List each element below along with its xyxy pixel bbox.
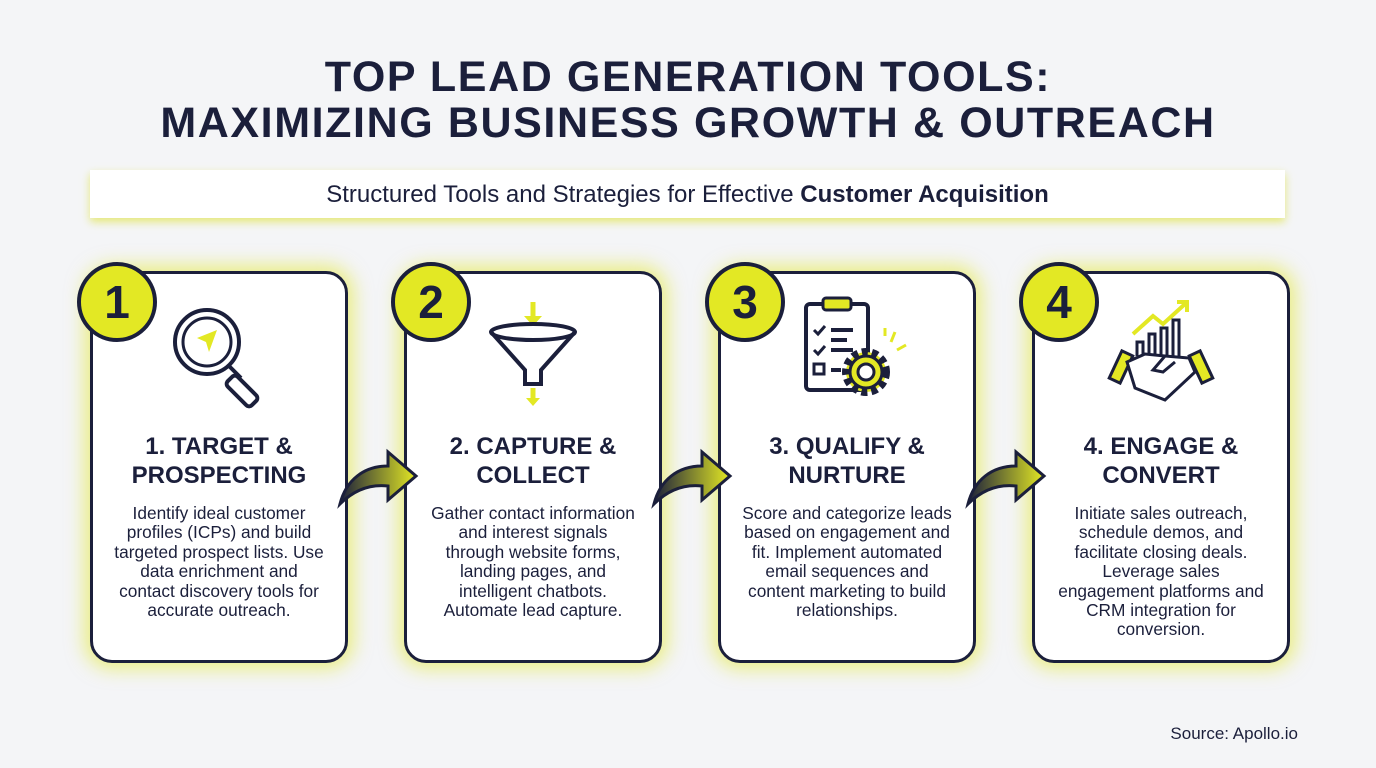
badge 2: 2 — [418, 276, 444, 328]
arrow 2 — [651, 448, 732, 509]
title — [160, 53, 1216, 147]
body text: Initiate sales outreach, schedule demos, and facilitate closing deals. Leverage sales engagement platforms and CRM integration for conversion. — [1058, 503, 1264, 639]
icon: magnifier — [173, 308, 260, 408]
badge 4: 4 — [1046, 276, 1072, 328]
heading: 1. TARGET & — [145, 433, 293, 460]
badge 1 — [77, 262, 157, 342]
heading — [132, 433, 306, 489]
subtitle banner — [90, 170, 1285, 218]
badge 4 — [1019, 262, 1099, 342]
source: Source: Apollo.io — [1170, 724, 1298, 743]
title: TOP LEAD GENERATION TOOLS: — [325, 53, 1051, 101]
heading — [1084, 433, 1238, 489]
heading — [769, 433, 925, 489]
panel: step 3 — [718, 271, 976, 663]
arrow 3 — [965, 448, 1046, 509]
panel: step 4 — [1032, 271, 1290, 663]
badge 3 — [705, 262, 785, 342]
body text: Gather contact information and interest signals through website forms, landing pages, and intelligent chatbots. Automate lead capture. — [431, 503, 635, 620]
heading — [450, 433, 616, 489]
body text: Identify ideal customer profiles (ICPs) and build targeted prospect lists. Use data enrichment and contact discovery tools for accurate outreach. — [114, 503, 324, 620]
icon: handshake with chart — [1107, 300, 1215, 402]
heading: 3. QUALIFY & — [769, 433, 925, 460]
heading: NURTURE — [788, 462, 906, 489]
panel: step 2 — [404, 271, 662, 663]
badge 1: 1 — [104, 276, 130, 328]
icon: clipboard with gear — [804, 296, 907, 396]
badge 3: 3 — [732, 276, 758, 328]
heading: CONVERT — [1102, 462, 1220, 489]
body text: Score and categorize leads based on engagement and fit. Implement automated email sequences and content marketing to build relationships. — [742, 503, 952, 620]
heading: PROSPECTING — [132, 462, 306, 489]
subtitle banner: Structured Tools and Strategies for Effective Customer Acquisition — [326, 181, 1049, 208]
heading: 2. CAPTURE & — [450, 433, 616, 460]
heading: 4. ENGAGE & — [1084, 433, 1238, 460]
arrow 1 — [337, 448, 418, 509]
badge 2 — [391, 262, 471, 342]
icon: funnel — [489, 302, 577, 406]
heading: COLLECT — [476, 462, 590, 489]
panel: step 1 — [90, 271, 348, 663]
title: MAXIMIZING BUSINESS GROWTH & OUTREACH — [160, 99, 1216, 147]
